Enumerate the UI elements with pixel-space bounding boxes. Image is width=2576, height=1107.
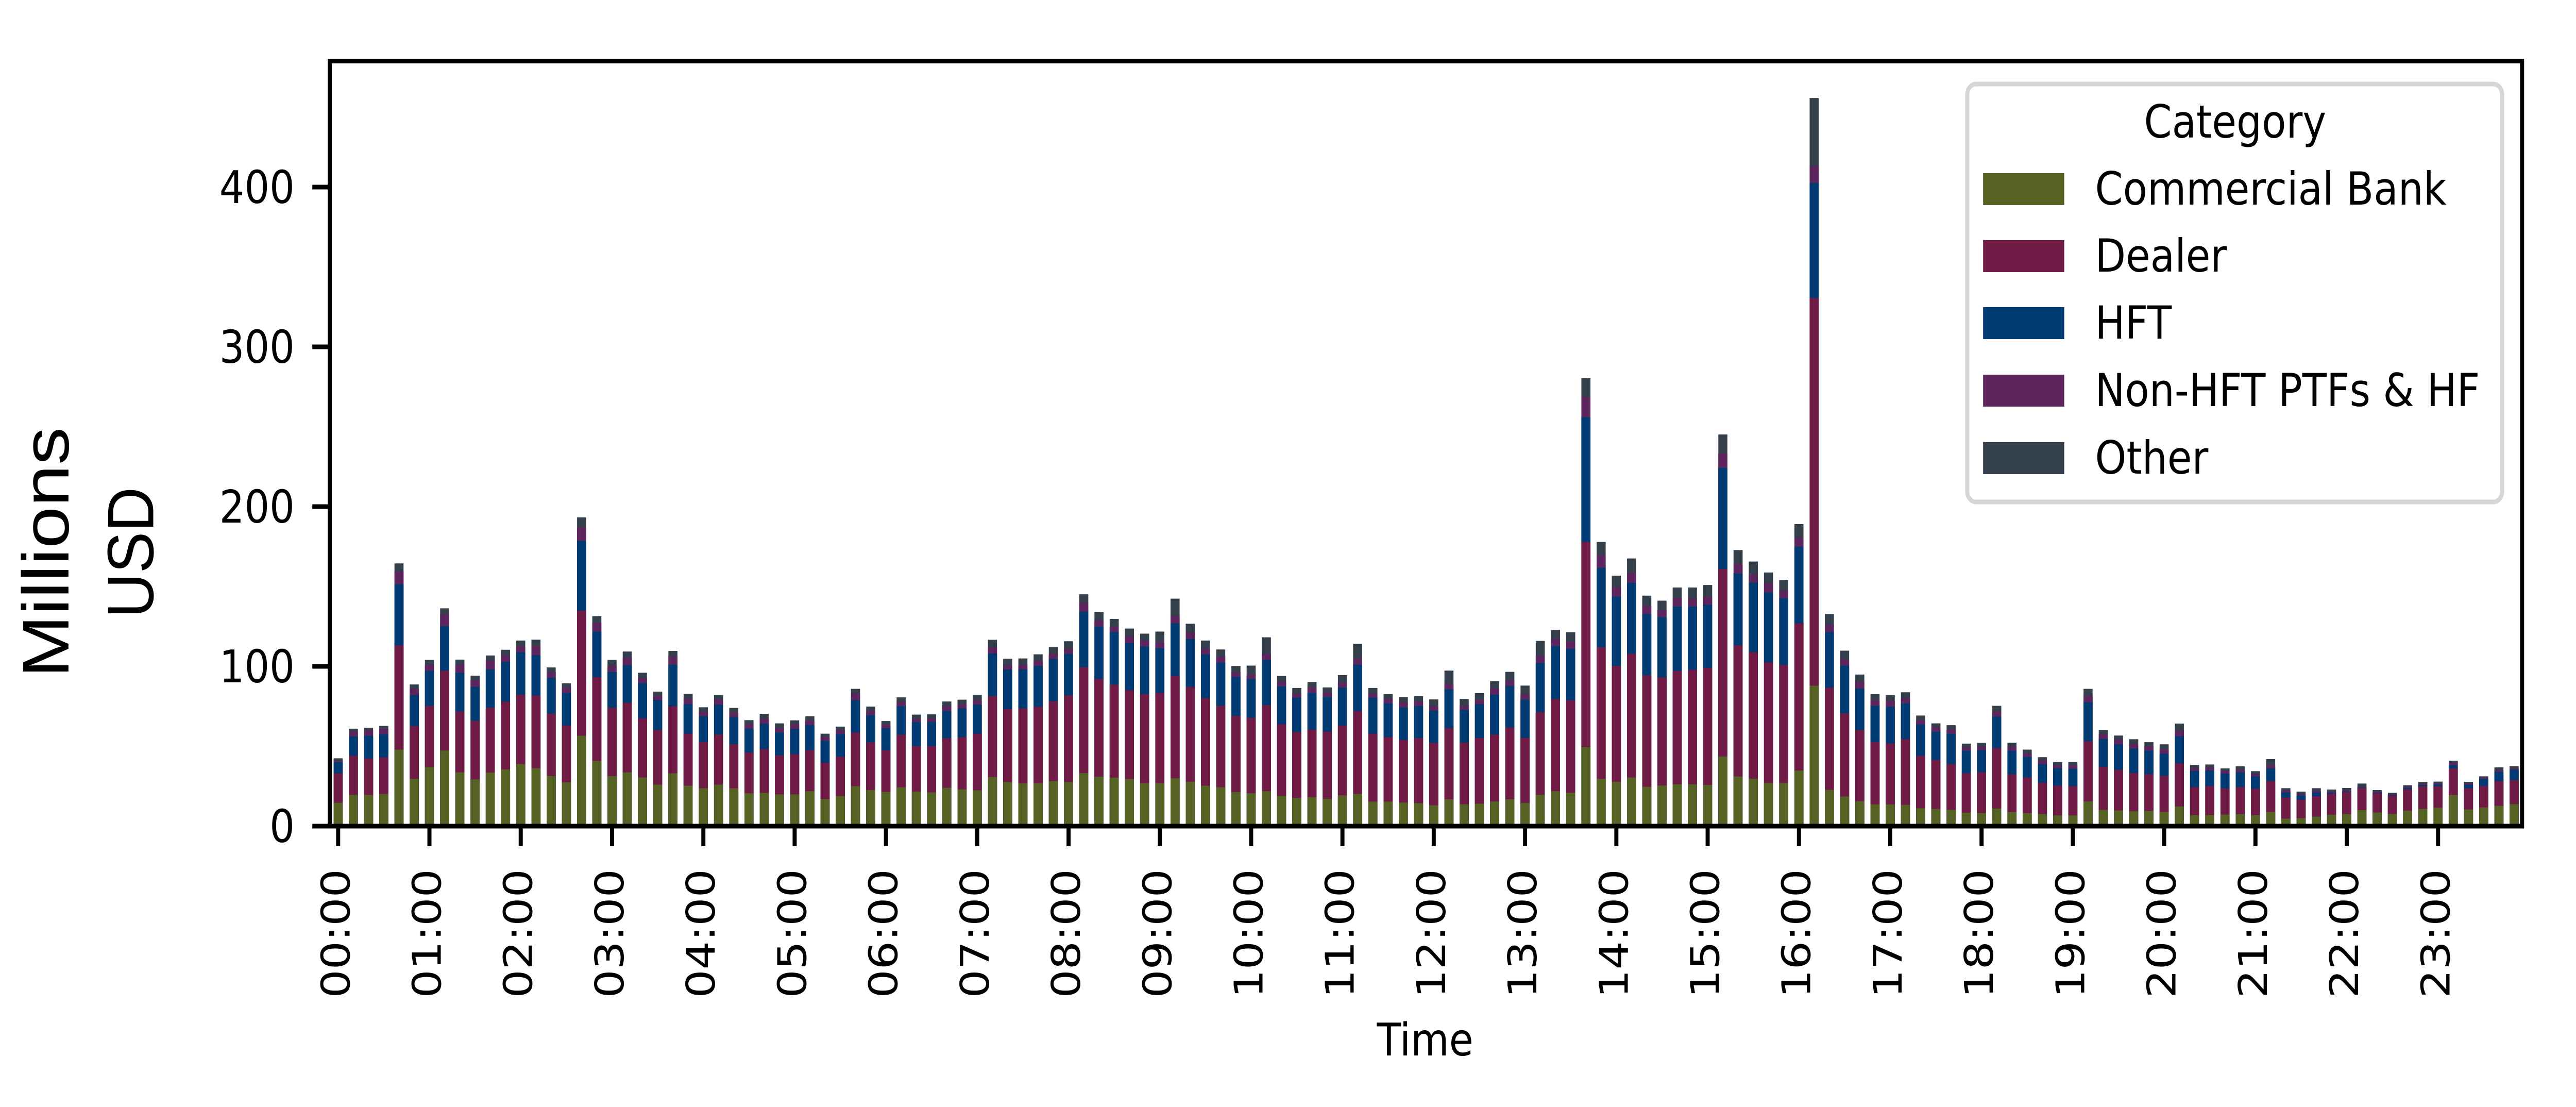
x axis tick labels: 02:00 [496, 869, 541, 998]
segments: Commercial Bank [1449, 747, 1799, 826]
x axis tick labels: 10:00 [1226, 869, 1272, 998]
y axis tick labels: 300 [219, 322, 295, 374]
legend title: Category [2144, 95, 2326, 148]
x axis tick labels: 08:00 [1044, 869, 1090, 998]
x axis tick labels: 04:00 [679, 869, 724, 998]
x axis tick labels: 12:00 [1409, 869, 1455, 998]
legend [1967, 84, 2502, 502]
x axis tick labels: 20:00 [2140, 869, 2185, 998]
segments: Other [1449, 378, 1799, 826]
y axis tick labels: 200 [219, 481, 295, 533]
segments: HFT [338, 541, 1434, 826]
segments: HFT [1449, 417, 1799, 826]
x axis tick labels: 19:00 [2048, 869, 2094, 998]
segments: Commercial Bank [338, 736, 1434, 826]
x axis tick labels [313, 869, 2459, 998]
segments: Non-HFT PTFs & HF [2195, 763, 2514, 826]
y axis ticks [312, 187, 330, 826]
segments: Other [1814, 98, 2179, 826]
stacked bars 12:10 to 16:00 [1449, 378, 1799, 826]
segments: Other [2195, 759, 2514, 826]
segments: HFT [1814, 183, 2179, 826]
segments: Dealer [1449, 542, 1799, 826]
x axis tick labels: 16:00 [1774, 869, 1820, 998]
x axis tick labels: 14:00 [1591, 869, 1637, 998]
y axis tick labels: 400 [219, 162, 295, 214]
segments: Commercial Bank [2195, 795, 2514, 826]
x axis tick labels: 17:00 [1866, 869, 1911, 998]
segments: HFT [2195, 765, 2514, 826]
y axis tick labels: 0 [269, 801, 295, 853]
legend item: HFT [1983, 296, 2172, 349]
x axis tick labels: 22:00 [2322, 869, 2368, 998]
segments: Dealer [2195, 768, 2514, 826]
x axis tick labels: 05:00 [770, 869, 816, 998]
legend item: Dealer [1983, 229, 2227, 282]
x axis tick labels: 15:00 [1683, 869, 1728, 998]
x axis tick labels: 06:00 [861, 869, 907, 998]
x axis tick labels: 01:00 [404, 869, 450, 998]
legend item: HFT: HFT [2095, 296, 2172, 349]
x axis tick labels: 09:00 [1135, 869, 1181, 998]
plot frame [330, 61, 2522, 826]
y axis title: USD [94, 487, 167, 618]
legend item: Non-HFT PTFs & HF: Non-HFT PTFs & HF [2095, 364, 2480, 417]
x axis ticks [338, 826, 2438, 846]
stacked bars 20:20 to 23:50 [2195, 759, 2514, 826]
x axis tick labels: 03:00 [587, 869, 633, 998]
stacked bars 00:00 to 12:00 [338, 517, 1434, 826]
x axis title: Time [1377, 1014, 1473, 1066]
legend item: Commercial Bank: Commercial Bank [2095, 162, 2447, 215]
x axis tick labels: 13:00 [1500, 869, 1546, 998]
segments: Dealer [338, 611, 1434, 826]
y axis tick labels [219, 162, 295, 853]
x axis tick labels: 11:00 [1318, 869, 1363, 998]
segments: Other [338, 517, 1434, 826]
legend frame [1967, 84, 2502, 502]
segments: Commercial Bank [1814, 685, 2179, 826]
y axis title: Millions [9, 427, 82, 678]
y axis title [9, 427, 167, 678]
segments: Non-HFT PTFs & HF [1449, 397, 1799, 826]
x axis tick labels: 18:00 [1957, 869, 2003, 998]
legend item: Other: Other [2095, 431, 2209, 484]
segments: Non-HFT PTFs & HF [1814, 166, 2179, 826]
x axis tick labels: 23:00 [2413, 869, 2459, 998]
legend item: Other [1983, 431, 2209, 484]
x axis tick labels: 21:00 [2231, 869, 2276, 998]
segments: Non-HFT PTFs & HF [338, 527, 1434, 826]
stacked bars 16:10 to 20:10 [1814, 98, 2179, 826]
y axis tick labels: 100 [219, 641, 295, 693]
segments: Dealer [1814, 298, 2179, 826]
x axis tick labels: 07:00 [953, 869, 998, 998]
legend item: Dealer: Dealer [2095, 229, 2227, 282]
x axis tick labels: 00:00 [313, 869, 359, 998]
